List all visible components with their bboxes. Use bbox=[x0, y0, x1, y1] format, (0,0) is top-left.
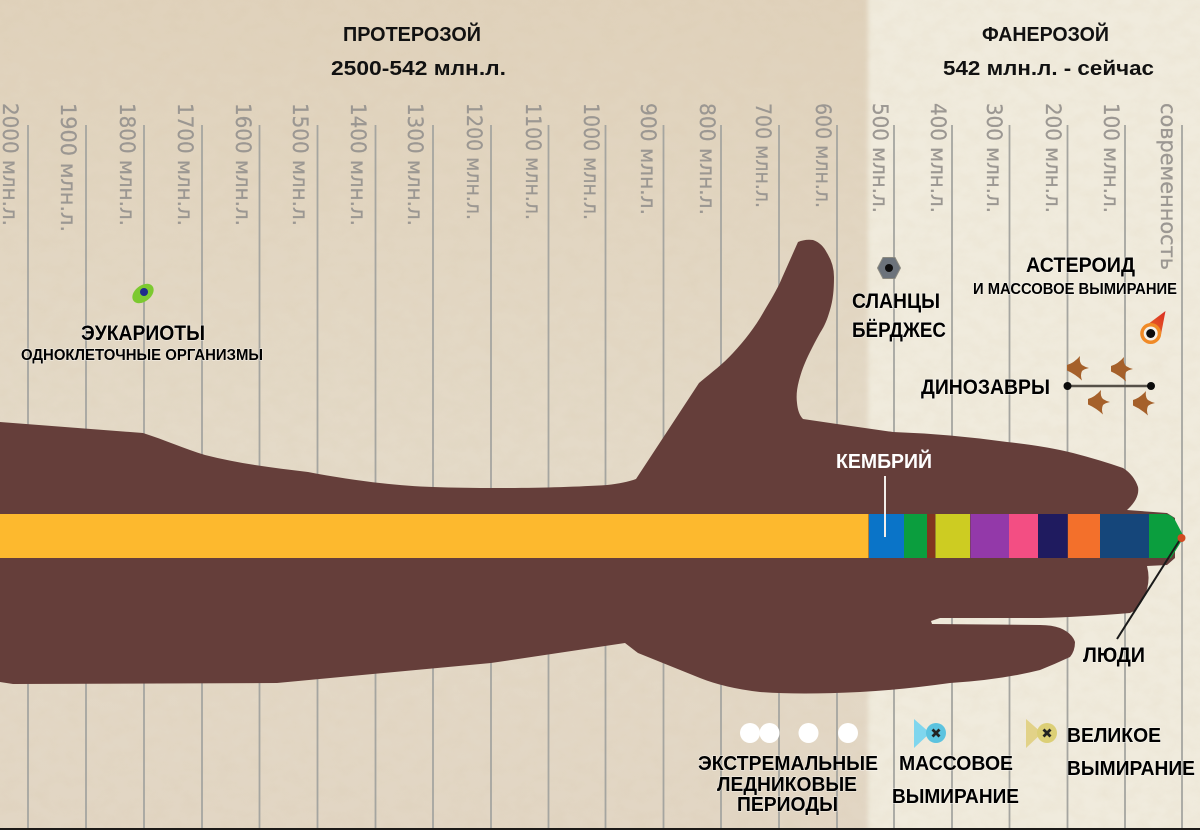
band segment: jurassic bbox=[1068, 514, 1100, 558]
time axis labels: 1400 млн.л. bbox=[346, 103, 370, 226]
bottom border bbox=[0, 828, 1200, 830]
band segment: triassic bbox=[1038, 514, 1068, 558]
burgess shale label: БЁРДЖЕС bbox=[852, 319, 946, 342]
time axis labels: 500 млн.л. bbox=[868, 103, 892, 213]
band segment: ordovician bbox=[904, 514, 927, 558]
band segment: proterozoic bbox=[0, 514, 868, 558]
cambrian label: КЕМБРИЙ bbox=[836, 449, 932, 473]
eukaryotes label: ОДНОКЛЕТОЧНЫЕ ОРГАНИЗМЫ bbox=[21, 347, 263, 364]
extreme glaciations label: ЛЕДНИКОВЫЕ bbox=[717, 773, 857, 796]
great extinction label bbox=[1067, 724, 1195, 780]
time axis labels: 600 млн.л. bbox=[811, 103, 835, 208]
time axis labels: 1200 млн.л. bbox=[462, 103, 486, 220]
dinosaurs label: ДИНОЗАВРЫ bbox=[921, 376, 1050, 399]
time axis labels: 100 млн.л. bbox=[1099, 103, 1123, 213]
time axis labels: 800 млн.л. bbox=[695, 103, 719, 215]
heading: proterozoic: 2500-542 млн.л. bbox=[331, 58, 506, 80]
band segment: cenozoic tip bbox=[1149, 514, 1184, 558]
icon: dinosaur footprints bbox=[1067, 356, 1155, 416]
time axis labels: 300 млн.л. bbox=[982, 103, 1006, 213]
dinosaur era range bbox=[1064, 382, 1155, 390]
asteroid label: АСТЕРОИД bbox=[1026, 254, 1135, 277]
time axis labels: 400 млн.л. bbox=[926, 103, 950, 213]
heading: phanerozoic bbox=[943, 22, 1154, 80]
time axis labels: 1500 млн.л. bbox=[288, 103, 312, 226]
great extinction label: ВЫМИРАНИЕ bbox=[1067, 757, 1195, 780]
time axis labels: 200 млн.л. bbox=[1041, 103, 1065, 213]
arm and hand silhouette bbox=[0, 240, 1175, 694]
time axis labels: 1800 млн.л. bbox=[115, 103, 139, 226]
time axis labels: 1300 млн.л. bbox=[403, 103, 427, 226]
icon: eukaryote cell bbox=[129, 280, 157, 307]
heading: proterozoic bbox=[331, 22, 506, 80]
extreme glaciations label bbox=[698, 752, 878, 816]
time axis labels: 1900 млн.л. bbox=[56, 103, 80, 232]
mass extinction label bbox=[892, 752, 1019, 808]
icon: extreme glaciations bbox=[740, 723, 858, 743]
band segment: permian bbox=[1009, 514, 1038, 558]
icon: mass extinction fish bbox=[914, 719, 946, 748]
band segment: devonian bbox=[936, 514, 970, 558]
time axis labels bbox=[0, 103, 1180, 270]
heading: phanerozoic: ФАНЕРОЗОЙ bbox=[982, 22, 1109, 46]
band segment: carboniferous bbox=[970, 514, 1009, 558]
band segment: silurian bbox=[927, 514, 935, 558]
mass extinction label: МАССОВОЕ bbox=[899, 752, 1013, 775]
time axis labels: 1600 млн.л. bbox=[231, 103, 255, 226]
time axis labels: 1000 млн.л. bbox=[579, 103, 603, 220]
extreme glaciations label: ЭКСТРЕМАЛЬНЫЕ bbox=[698, 752, 878, 775]
time axis labels: 1100 млн.л. bbox=[521, 103, 545, 220]
extreme glaciations label: ПЕРИОДЫ bbox=[737, 793, 838, 816]
great extinction label: ВЕЛИКОЕ bbox=[1067, 724, 1161, 747]
time axis labels: 1700 млн.л. bbox=[173, 103, 197, 226]
time axis labels: 700 млн.л. bbox=[751, 103, 775, 208]
icon: asteroid bbox=[1140, 311, 1166, 344]
humans label: ЛЮДИ bbox=[1083, 644, 1145, 667]
asteroid label bbox=[973, 254, 1177, 298]
time axis labels: 900 млн.л. bbox=[636, 103, 660, 215]
icon: great extinction fish bbox=[1026, 719, 1057, 748]
mass extinction label: ВЫМИРАНИЕ bbox=[892, 785, 1019, 808]
background: phanerozoic paper bbox=[868, 0, 1200, 830]
band segment: cambrian bbox=[869, 514, 904, 558]
eukaryotes label bbox=[21, 322, 263, 364]
icon: burgess shale bbox=[878, 258, 900, 278]
cambrian label bbox=[836, 449, 932, 537]
heading: proterozoic: ПРОТЕРОЗОЙ bbox=[343, 22, 481, 46]
humans pointer bbox=[1117, 534, 1186, 639]
asteroid label: И МАССОВОЕ ВЫМИРАНИЕ bbox=[973, 281, 1177, 298]
eukaryotes label: ЭУКАРИОТЫ bbox=[81, 322, 205, 345]
heading: phanerozoic: 542 млн.л. - сейчас bbox=[943, 58, 1154, 80]
burgess shale label bbox=[852, 290, 946, 342]
geological time band bbox=[0, 514, 1184, 558]
band segment: cretaceous bbox=[1100, 514, 1149, 558]
burgess shale label: СЛАНЦЫ bbox=[852, 290, 940, 313]
time axis labels: современность bbox=[1156, 103, 1180, 270]
